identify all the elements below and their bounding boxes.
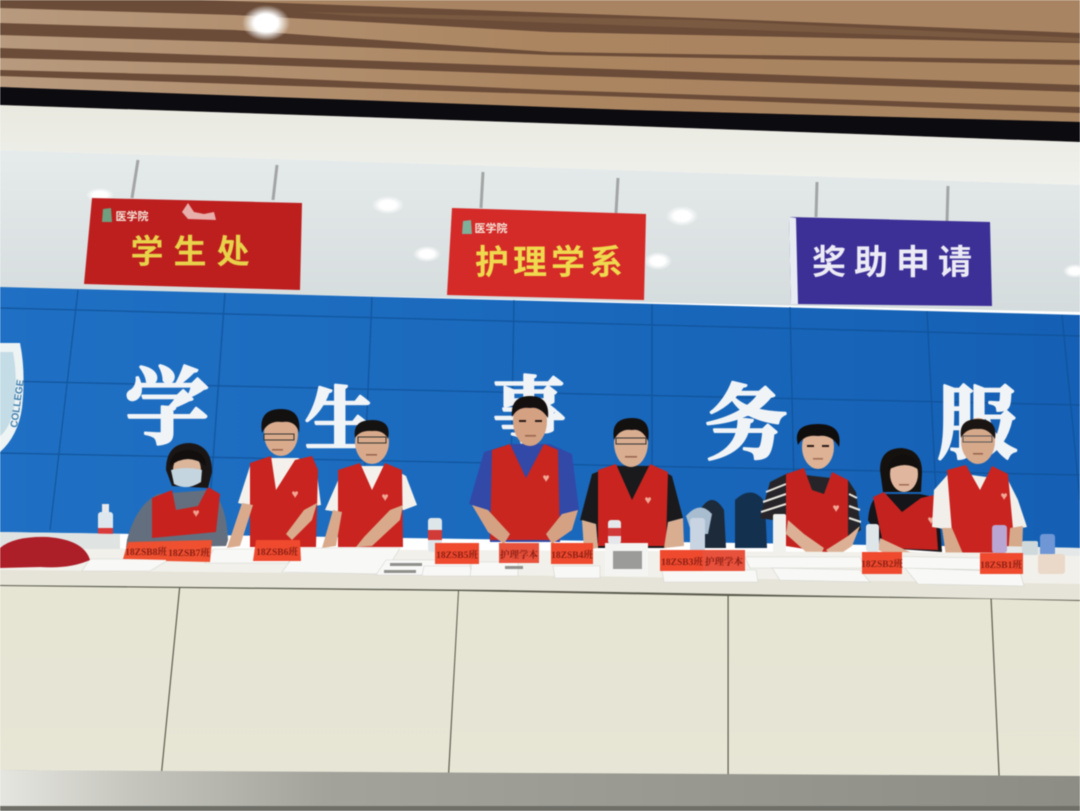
volunteer 2 [227, 409, 321, 548]
volunteer 8: white shirt: ♥ [1000, 489, 1008, 503]
hanging sign: student office [84, 198, 302, 290]
wall lettering: student affairs service: 事 [493, 372, 565, 452]
volunteer 7: girl in black [868, 448, 944, 562]
red name placards: 18ZSB2班 [861, 558, 903, 570]
volunteer 6: striped shirt [760, 424, 861, 558]
red name placards: 18ZSB5班 [436, 549, 478, 561]
red name placards: 护理学本 [705, 556, 743, 568]
volunteer 2: ♥ [291, 487, 299, 501]
floor skirting band [0, 770, 1080, 811]
hanging sign: scholarship application [789, 217, 992, 306]
red name placards: 18ZSB6班 [256, 546, 298, 558]
volunteer 5: black shirt [580, 418, 684, 550]
white soffit and recessed ceiling [0, 105, 1080, 312]
volunteer 4: blue shirt [469, 396, 579, 544]
hanging sign: nursing department [447, 208, 646, 300]
wall lettering: student affairs service: 生 [305, 383, 375, 460]
blue wall with tiled panels [0, 287, 1080, 548]
red jacket on counter [0, 537, 90, 568]
wooden slat ceiling [0, 0, 1080, 142]
bottles on counter [428, 518, 1065, 574]
college emblem on wall [0, 343, 27, 452]
volunteer 6: striped shirt: ♥ [832, 501, 840, 515]
hanging sign: scholarship application: 奖助申请 [812, 244, 980, 282]
red name placards: 18ZSB4班 [551, 549, 593, 561]
counter front panels [0, 585, 1080, 776]
wall lettering: student affairs service [125, 363, 1017, 470]
hanging sign: student office: 学生处 [130, 233, 260, 270]
backpacks behind counter [686, 492, 767, 548]
red name placards [123, 540, 1023, 574]
counter top surface with papers [0, 532, 1080, 600]
volunteer 4: blue shirt: ♥ [542, 471, 550, 485]
volunteer 7: girl in black: ♥ [927, 513, 935, 527]
red name placards: 护理学本 [500, 549, 538, 561]
wall lettering: student affairs service: 务 [705, 379, 787, 470]
hanging sign: student office: 医学院 [116, 209, 148, 223]
wall lettering: student affairs service: 服 [937, 382, 1017, 470]
college emblem on wall: COLLEGE [9, 379, 27, 428]
wall lettering: student affairs service: 学 [125, 363, 209, 456]
volunteer 5: black shirt: ♥ [644, 493, 652, 507]
volunteer 3: ♥ [381, 490, 389, 504]
volunteer 3 [322, 420, 417, 548]
volunteer 1: girl with mask: ♥ [192, 506, 200, 520]
hanging sign: nursing department: 医学院 [474, 221, 508, 235]
volunteer 8: white shirt [932, 418, 1027, 557]
hanging sign: nursing department: 护理学系 [475, 244, 627, 282]
red name placards: 18ZSB7班 [168, 547, 210, 559]
red name placards: 18ZSB3班 [661, 556, 703, 568]
thermos [773, 514, 786, 556]
water bottle [98, 504, 113, 550]
red name placards: 18ZSB1班 [980, 559, 1022, 571]
volunteer 1: girl with mask [126, 443, 228, 548]
red name placards: 18ZSB8班 [125, 546, 167, 558]
